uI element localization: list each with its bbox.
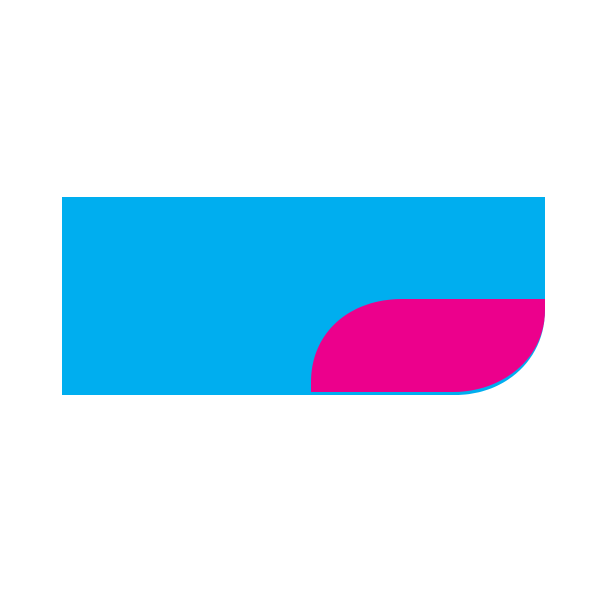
panel: magenta leaf corner — [311, 299, 545, 392]
panel: blue rectangle — [62, 197, 545, 395]
